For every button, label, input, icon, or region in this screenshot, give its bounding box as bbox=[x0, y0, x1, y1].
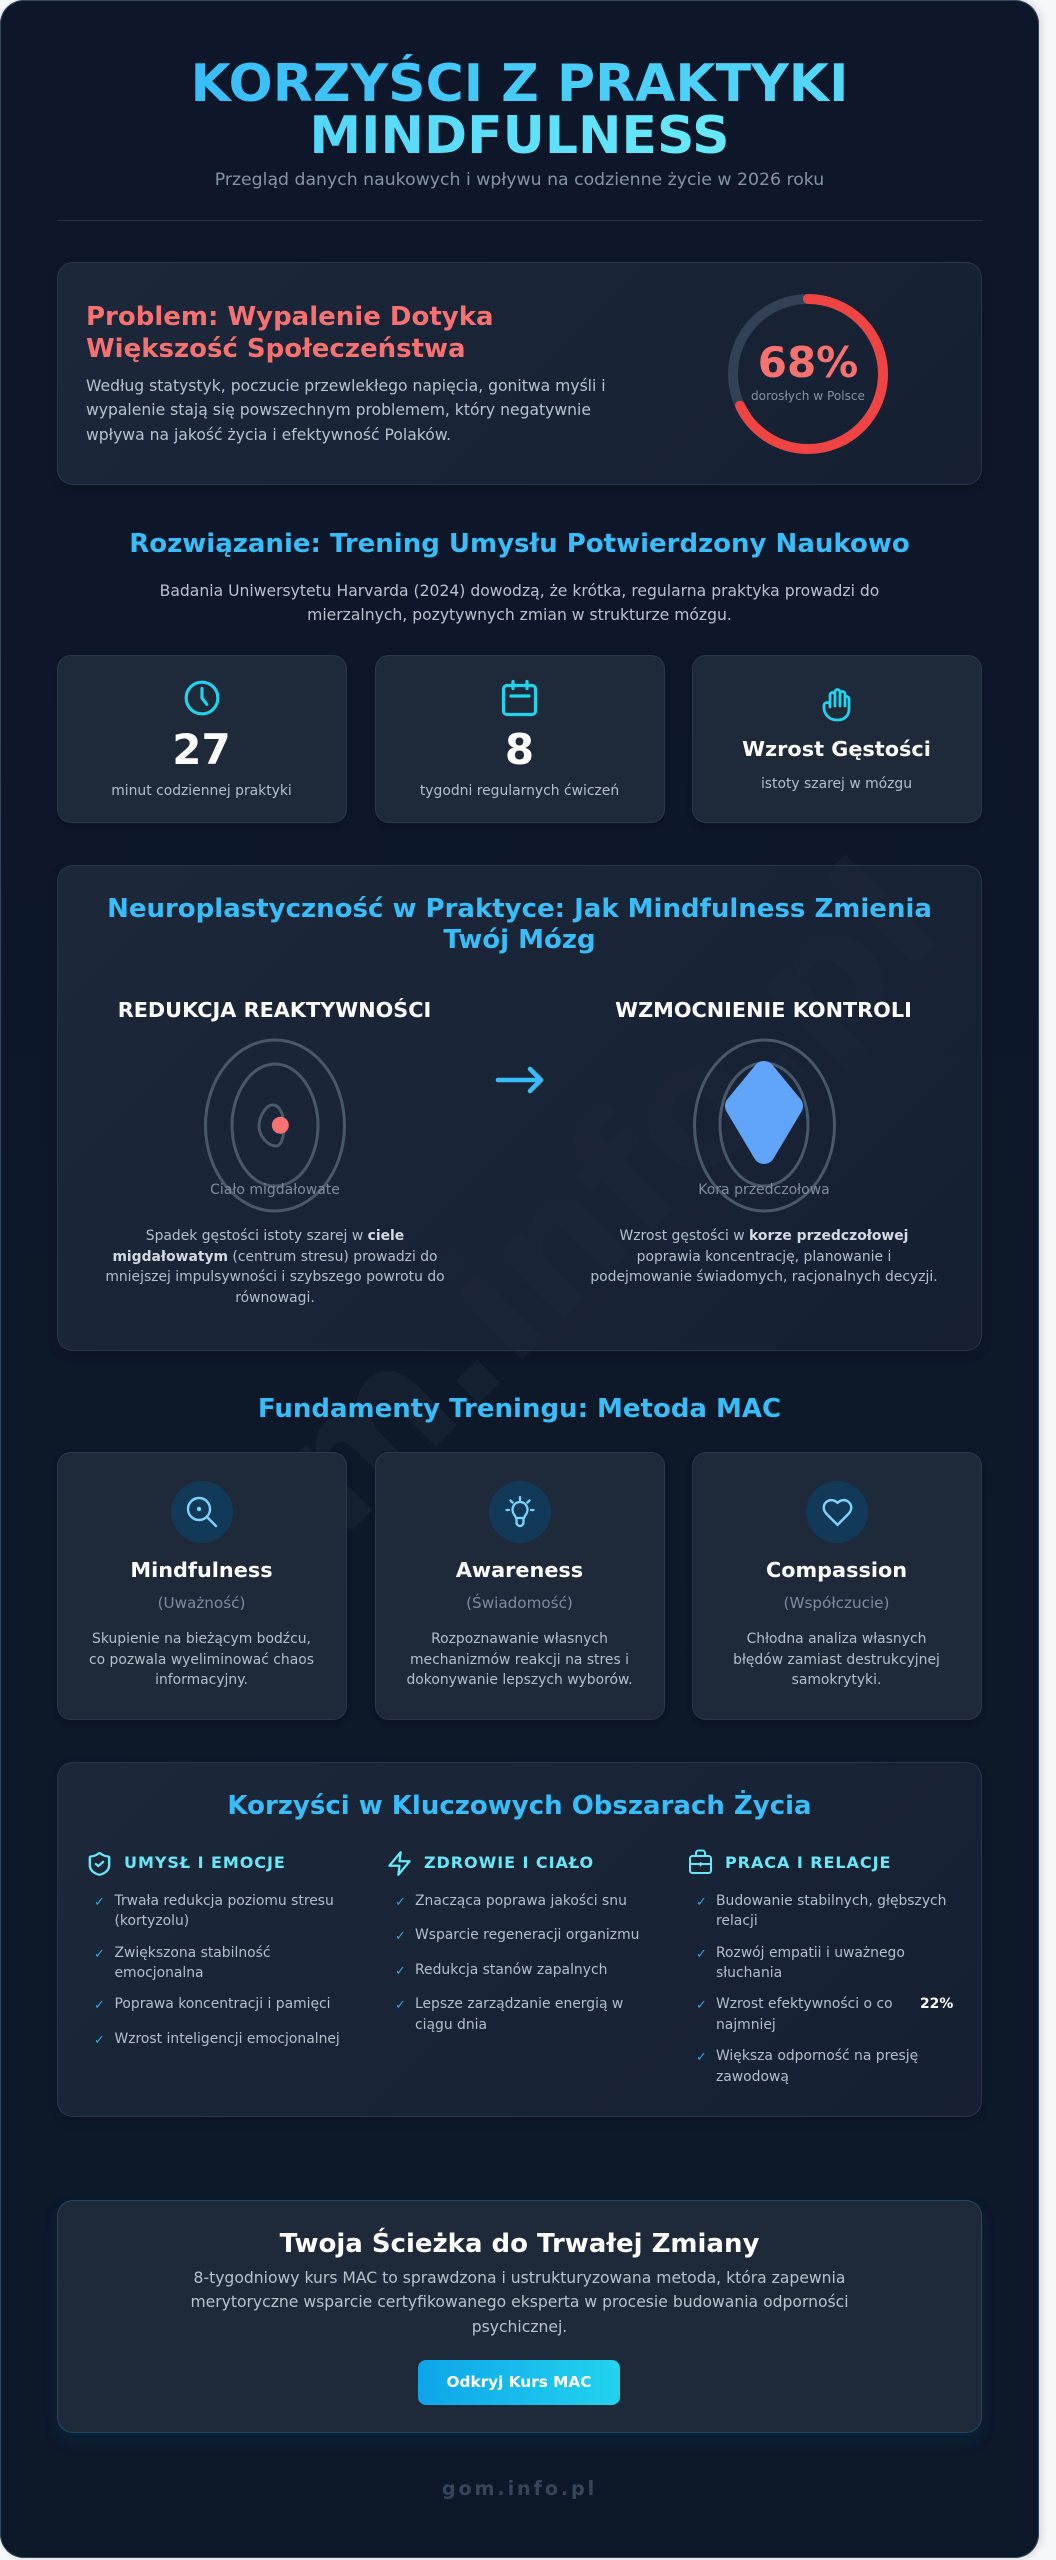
list: work: zawodową bbox=[716, 2069, 789, 2085]
list: mind: ✓ bbox=[94, 2033, 105, 2048]
left column text: migdałowatym (centrum stresu) prowadzi do bbox=[112, 1249, 438, 1265]
card text bbox=[733, 1631, 940, 1688]
title bbox=[191, 54, 848, 166]
problem text: wpływa na jakość życia i efektywność Polaków. bbox=[86, 426, 451, 444]
right column heading: WZMOCNIENIE KONTROLI bbox=[615, 998, 912, 1022]
card title: Awareness bbox=[456, 1558, 583, 1582]
list: health: ✓ bbox=[395, 1964, 406, 1979]
card subtitle: (Współczucie) bbox=[784, 1594, 889, 1612]
column heading: mind: UMYSŁ I EMOCJE bbox=[124, 1853, 286, 1872]
list: mind: ✓ bbox=[94, 1998, 105, 2013]
card text: Skupienie na bieżącym bodźcu, bbox=[92, 1631, 311, 1647]
problem text: wypalenie stają się powszechnym problemem, który negatywnie bbox=[86, 401, 591, 419]
list: health: ✓ bbox=[395, 1895, 406, 1910]
list: health: Wsparcie regeneracji organizmu bbox=[415, 1927, 639, 1943]
heading: MAC method: Fundamenty Treningu: Metoda MAC bbox=[258, 1394, 781, 1424]
icon: hand bbox=[822, 688, 850, 722]
call to action text: 8-tygodniowy kurs MAC to sprawdzona i ustrukturyzowana metoda, która zapewnia bbox=[194, 2269, 845, 2287]
stat title: Wzrost Gęstości bbox=[742, 737, 931, 761]
heading: solution: Rozwiązanie: Trening Umysłu Potwierdzony Naukowo bbox=[129, 529, 910, 559]
card title: Compassion bbox=[766, 1558, 907, 1582]
prefrontal label: Kora przedczołowa bbox=[698, 1182, 830, 1198]
card: compassion bbox=[692, 1452, 982, 1720]
title: MINDFULNESS bbox=[309, 106, 730, 166]
list: mind: Trwała redukcja poziomu stresu bbox=[114, 1893, 334, 1909]
solution text: mierzalnych, pozytywnych zmian w strukturze mózgu. bbox=[307, 606, 732, 624]
panel: neuroplasticity bbox=[57, 865, 982, 1351]
card subtitle: (Uważność) bbox=[158, 1594, 245, 1612]
icon: shield bbox=[88, 1852, 110, 1876]
card text: dokonywanie lepszych wyborów. bbox=[406, 1672, 632, 1688]
left column text: równowagi. bbox=[235, 1290, 315, 1306]
list: mind: Poprawa koncentracji i pamięci bbox=[114, 1996, 331, 2012]
donut chart 68% bbox=[728, 294, 888, 454]
panel: problem bbox=[57, 262, 982, 485]
stat card: 8 weeks bbox=[375, 655, 664, 823]
stat label: minut codziennej praktyki bbox=[111, 783, 292, 799]
right column text: Wzrost gęstości w korze przedczołowej bbox=[620, 1228, 908, 1244]
column heading: work: PRACA I RELACJE bbox=[725, 1853, 891, 1872]
solution text bbox=[160, 582, 879, 624]
stat value: 27 bbox=[172, 725, 231, 774]
icon: calendar bbox=[502, 680, 538, 716]
stat card: 27 minutes bbox=[57, 655, 346, 823]
button: Odkryj Kurs MAC bbox=[447, 2373, 591, 2391]
problem text: Według statystyk, poczucie przewlekłego napięcia, gonitwa myśli i bbox=[86, 376, 606, 394]
neuroplasticity heading: Neuroplastyczność w Praktyce: Jak Mindfulness Zmienia bbox=[107, 894, 932, 924]
footer brand: gom.info.pl bbox=[442, 2477, 597, 2500]
neuroplasticity heading bbox=[107, 894, 932, 955]
watermark: gom.info.pl bbox=[61, 824, 976, 1739]
icon: light bulb bbox=[489, 1481, 551, 1543]
card subtitle: (Świadomość) bbox=[466, 1594, 573, 1612]
list: work: słuchania bbox=[716, 1965, 782, 1981]
list: mind: emocjonalna bbox=[114, 1965, 204, 1981]
call to action heading: Twoja Ścieżka do Trwałej Zmiany bbox=[280, 2229, 759, 2259]
card title: Mindfulness bbox=[130, 1558, 273, 1582]
list: work: Budowanie stabilnych, głębszych bbox=[716, 1893, 946, 1909]
neuroplasticity heading: Twój Mózg bbox=[443, 925, 596, 955]
subtitle: Przegląd danych naukowych i wpływu na codzienne życie w 2026 roku bbox=[215, 170, 824, 190]
list: health: Znacząca poprawa jakości snu bbox=[415, 1893, 627, 1909]
card text bbox=[406, 1631, 632, 1688]
list: work: 22% bbox=[920, 1996, 953, 2012]
column heading: health: ZDROWIE I CIAŁO bbox=[424, 1853, 594, 1872]
card: mindfulness bbox=[57, 1452, 346, 1720]
amygdala label: Ciało migdałowate bbox=[210, 1182, 340, 1198]
card text: co pozwala wyeliminować chaos bbox=[89, 1652, 314, 1668]
left column heading: REDUKCJA REAKTYWNOŚCI bbox=[118, 998, 431, 1022]
list: health: Redukcja stanów zapalnych bbox=[415, 1962, 607, 1978]
diagram: prefrontal cortex bbox=[693, 1038, 836, 1212]
list: health bbox=[395, 1893, 639, 2033]
list: work: ✓ bbox=[696, 1895, 707, 1910]
list: work: Rozwój empatii i uważnego bbox=[716, 1945, 905, 1961]
list: work bbox=[696, 1893, 953, 2085]
list: work: Większa odporność na presję bbox=[716, 2048, 918, 2064]
stat label: istoty szarej w mózgu bbox=[761, 776, 912, 792]
right column text: podejmowanie świadomych, racjonalnych decyzji. bbox=[590, 1269, 938, 1285]
list: work: ✓ bbox=[696, 1947, 707, 1962]
card text: Chłodna analiza własnych bbox=[747, 1631, 926, 1647]
panel: benefits bbox=[57, 1762, 982, 2117]
icon: briefcase bbox=[689, 1850, 712, 1874]
card text: mechanizmów reakcji na stres i bbox=[410, 1652, 629, 1668]
card text: samokrytyki. bbox=[792, 1672, 881, 1688]
card text: Rozpoznawanie własnych bbox=[431, 1631, 608, 1647]
problem text bbox=[86, 376, 606, 444]
card text: informacyjny. bbox=[155, 1672, 248, 1688]
icon: bolt bbox=[388, 1851, 411, 1876]
list: health: ✓ bbox=[395, 1998, 406, 2013]
icon: magnifier bbox=[171, 1481, 233, 1543]
list: work: relacji bbox=[716, 1913, 758, 1929]
problem heading bbox=[86, 302, 494, 364]
right column text: poprawia koncentrację, planowanie i bbox=[637, 1249, 891, 1265]
call to action text: merytoryczne wsparcie certyfikowanego eksperta w procesie budowania odporności bbox=[190, 2293, 849, 2311]
card text: błędów zamiast destrukcyjnej bbox=[733, 1652, 940, 1668]
panel: call to action bbox=[57, 2200, 982, 2433]
list: work: najmniej bbox=[716, 2017, 776, 2033]
left column text: Spadek gęstości istoty szarej w ciele bbox=[146, 1228, 404, 1244]
icon: heart bbox=[806, 1481, 868, 1543]
diagram: amygdala bbox=[204, 1038, 346, 1212]
donut value: 68% bbox=[758, 338, 858, 387]
left column text: mniejszej impulsywności i szybszego powrotu do bbox=[105, 1269, 445, 1285]
left column text bbox=[105, 1228, 445, 1306]
list: health: ✓ bbox=[395, 1929, 406, 1944]
list: work: Wzrost efektywności o co bbox=[716, 1996, 893, 2012]
benefits heading: Korzyści w Kluczowych Obszarach Życia bbox=[227, 1791, 812, 1821]
call to action text: psychicznej. bbox=[472, 2318, 567, 2336]
list: mind: ✓ bbox=[94, 1947, 105, 1962]
list: mind: Zwiększona stabilność bbox=[114, 1945, 270, 1961]
list: mind: ✓ bbox=[94, 1895, 105, 1910]
title: KORZYŚCI Z PRAKTYKI bbox=[191, 54, 848, 114]
list: work: ✓ bbox=[696, 1998, 707, 2013]
solution text: Badania Uniwersytetu Harvarda (2024) dowodzą, że krótka, regularna praktyka prowadzi do bbox=[160, 582, 879, 600]
problem heading: Problem: Wypalenie Dotyka bbox=[86, 302, 494, 332]
right column text bbox=[590, 1228, 938, 1285]
button bbox=[418, 2360, 620, 2405]
donut label: dorosłych w Polsce bbox=[751, 389, 865, 403]
list: work: ✓ bbox=[696, 2050, 707, 2065]
list: health: Lepsze zarządzanie energią w bbox=[415, 1996, 623, 2012]
card text bbox=[89, 1631, 314, 1688]
list: mind: Wzrost inteligencji emocjonalnej bbox=[114, 2031, 340, 2047]
list: mind bbox=[94, 1893, 340, 2048]
icon: clock bbox=[184, 680, 220, 716]
list: mind: (kortyzolu) bbox=[114, 1913, 189, 1929]
stat card: grey matter density bbox=[692, 655, 982, 823]
stat label: tygodni regularnych ćwiczeń bbox=[420, 783, 619, 799]
call to action text bbox=[190, 2269, 849, 2336]
problem heading: Większość Społeczeństwa bbox=[86, 334, 466, 364]
card: awareness bbox=[375, 1452, 664, 1720]
arrow bbox=[496, 1066, 544, 1094]
stat value: 8 bbox=[505, 725, 534, 774]
list: health: ciągu dnia bbox=[415, 2017, 487, 2033]
